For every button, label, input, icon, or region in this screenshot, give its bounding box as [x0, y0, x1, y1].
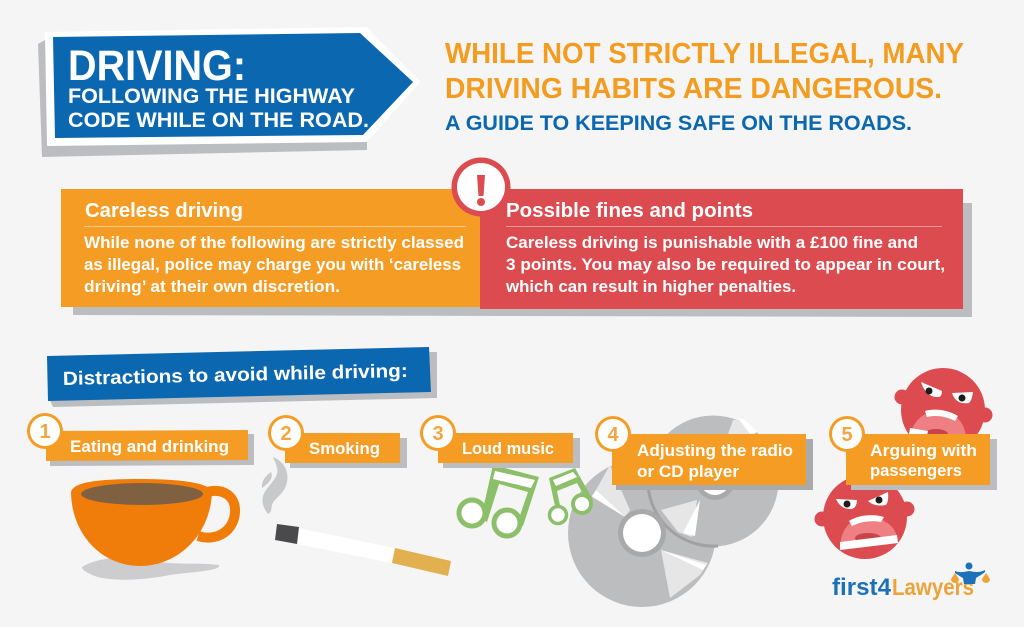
main heading: WHILE NOT STRICTLY ILLEGAL, MANY: [445, 38, 964, 70]
panel: possible fines and points: [480, 189, 963, 309]
careless driving text: driving’ at their own discretion.: [84, 278, 340, 296]
banner subtitle: FOLLOWING THE HIGHWAY: [68, 84, 355, 108]
label 2: smoking: 2: [280, 423, 292, 445]
icon: music notes: [459, 465, 593, 536]
careless driving text: as illegal, police may charge you with ‘careless: [84, 256, 461, 274]
careless driving heading: Careless driving: [85, 200, 243, 222]
logo: first4lawyers: Lawyers: [892, 574, 974, 600]
careless driving text: While none of the following are strictly classed: [84, 234, 464, 252]
careless driving text: [84, 234, 464, 296]
sub heading: A GUIDE TO KEEPING SAFE ON THE ROADS.: [445, 112, 912, 135]
label 2: smoking: Smoking: [309, 439, 380, 458]
icon: coffee cup: [71, 479, 235, 580]
small music note: [549, 468, 593, 524]
label 5: arguing with passengers: passengers: [870, 461, 962, 480]
label 1: eating and drinking: [27, 413, 254, 466]
label 5: arguing with passengers: Arguing with: [870, 441, 977, 460]
label 5: arguing with passengers: [829, 416, 997, 490]
panel shadow: [73, 203, 972, 317]
label 4: adjusting the radio or CD player: 4: [607, 424, 619, 446]
label 2: smoking: [268, 415, 407, 468]
label 1: eating and drinking: Eating and drinking: [70, 437, 229, 456]
rear disc: [648, 416, 778, 546]
logo: first4lawyers: first4: [832, 574, 892, 601]
icon: warning exclamation: [452, 158, 510, 216]
icon: angry face bottom: [814, 475, 914, 559]
banner subtitle: CODE WHILE ON THE ROAD.: [68, 108, 369, 132]
label 4: adjusting the radio or CD player: or CD player: [637, 462, 739, 481]
label 5: arguing with passengers: 5: [841, 424, 853, 446]
icon: compact discs: [568, 416, 778, 607]
banner title: DRIVING:: [68, 42, 246, 90]
fines text: [505, 234, 945, 296]
large music note: [459, 465, 539, 536]
road sign banner: [38, 28, 419, 157]
label 3: loud music: [420, 415, 580, 468]
front disc hub: [618, 509, 666, 557]
distractions banner: [47, 347, 437, 407]
panel: careless driving: [61, 189, 481, 307]
label 1: eating and drinking: 1: [39, 421, 51, 443]
banner subtitle: [68, 84, 369, 132]
label 4: adjusting the radio or CD player: Adjusting the radio: [637, 441, 793, 460]
icon: angry face top: [894, 368, 992, 452]
main heading: DRIVING HABITS ARE DANGEROUS.: [445, 73, 942, 105]
fines text: Careless driving is punishable with a £100 fine and: [506, 234, 918, 252]
logo figure with scales: [951, 562, 990, 584]
front disc: [568, 459, 716, 607]
main heading: [445, 38, 964, 105]
logo: first4lawyers: [832, 562, 990, 601]
fines text: which can result in higher penalties.: [505, 278, 796, 296]
label 3: loud music: 3: [432, 423, 444, 445]
icon: smoke: [262, 457, 287, 514]
label 3: loud music: Loud music: [462, 439, 554, 458]
icon: cigarette: [275, 524, 451, 576]
distractions heading: Distractions to avoid while driving:: [63, 361, 408, 390]
fines text: 3 points. You may also be required to appear in court,: [506, 256, 945, 274]
label 4: adjusting the radio or CD player: [595, 416, 813, 490]
fines heading: Possible fines and points: [506, 200, 753, 222]
